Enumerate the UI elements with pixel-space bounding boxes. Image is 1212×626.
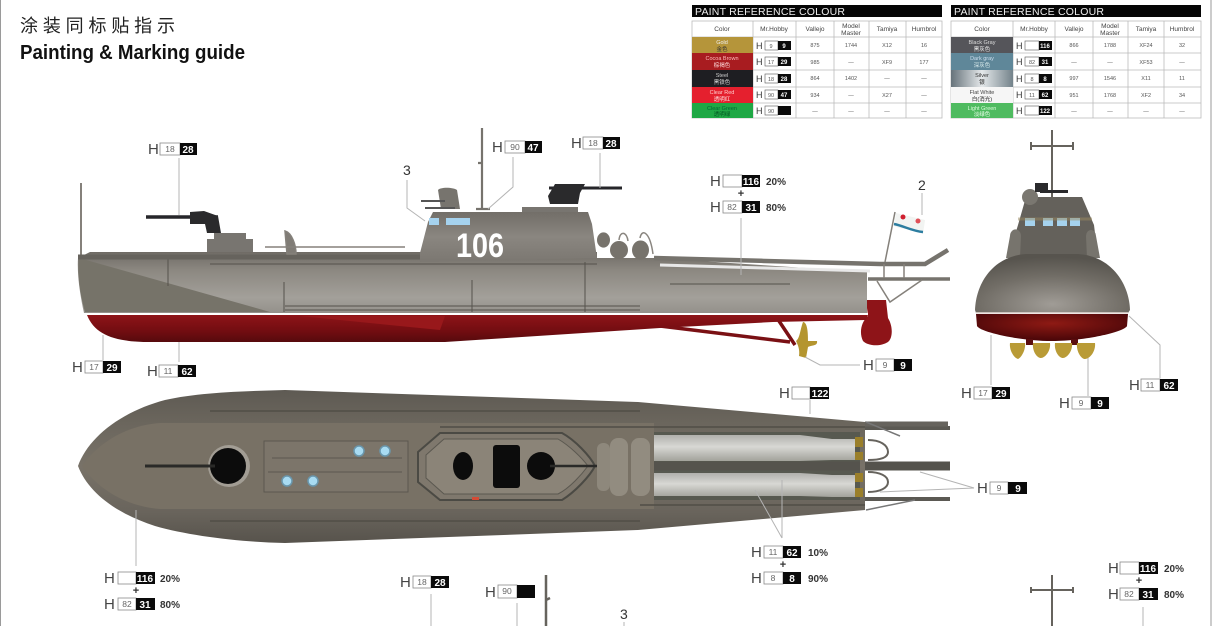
label mix H116 H82 right: + bbox=[1136, 575, 1142, 587]
red hull highlight bbox=[300, 316, 445, 330]
label H90 lower bbox=[485, 584, 535, 601]
label H17 29 front: H bbox=[961, 385, 972, 402]
paint table left: H bbox=[756, 90, 762, 100]
label mix H116 H82 top view: 82 bbox=[122, 599, 132, 609]
upper torpedo bbox=[654, 435, 855, 461]
propeller bbox=[796, 322, 817, 358]
paint table right: Black Gray bbox=[969, 40, 996, 46]
label H122 bbox=[779, 385, 829, 402]
paint table left: Clear Green bbox=[707, 106, 737, 112]
paint table right: Color bbox=[974, 26, 991, 33]
hull detail lines bbox=[168, 255, 790, 312]
paint table right: 34 bbox=[1179, 93, 1185, 99]
label H18 28 aft gun: H bbox=[571, 135, 582, 152]
label H9 9 front: 9 bbox=[1097, 399, 1103, 410]
paint table right: 122 bbox=[1040, 109, 1051, 115]
paint table left: 934 bbox=[810, 93, 820, 99]
red lower hull bbox=[87, 315, 868, 342]
label mix H11 H8 torpedoes: H bbox=[751, 570, 762, 587]
label H122: H bbox=[779, 385, 790, 402]
label mix H116 H82 right: H bbox=[1108, 560, 1119, 577]
paint table right: — bbox=[1179, 60, 1185, 66]
paint table left: Vallejo bbox=[805, 26, 825, 33]
label H18 28 lower: 18 bbox=[417, 577, 427, 587]
paint table left: Mr.Hobby bbox=[760, 26, 789, 33]
label H11 62 front: 11 bbox=[1146, 380, 1155, 390]
paint table left: — bbox=[848, 60, 854, 66]
label H11 62 front bbox=[1129, 377, 1178, 394]
label mix H116 H82 right: 20% bbox=[1164, 564, 1184, 575]
front view of boat bbox=[975, 130, 1130, 359]
paint table left: 18 bbox=[768, 77, 774, 83]
paint table left: Color bbox=[714, 26, 731, 33]
label mix H116 H82 top view: H bbox=[104, 570, 115, 587]
paint table right: 62 bbox=[1042, 93, 1049, 99]
four propellers bbox=[1010, 343, 1095, 359]
paint table left: — bbox=[921, 109, 927, 115]
paint table left: 9 bbox=[782, 44, 786, 50]
paint table left: 1744 bbox=[845, 43, 857, 49]
torpedo centre beam bbox=[654, 462, 860, 470]
label H18 28 lower: 28 bbox=[434, 578, 446, 589]
paint table right: 866 bbox=[1069, 43, 1079, 49]
paint table left: 1402 bbox=[845, 76, 857, 82]
paint table right: 32 bbox=[1179, 43, 1185, 49]
paint table left: 29 bbox=[781, 60, 788, 66]
paint table left: Master bbox=[841, 30, 862, 37]
paint table right: X11 bbox=[1141, 76, 1151, 82]
label H9 9 stern: H bbox=[977, 480, 988, 497]
label mix H11 H8 torpedoes: 8 bbox=[789, 574, 795, 585]
stern frames bbox=[868, 440, 888, 492]
top view of boat bbox=[78, 390, 950, 543]
paint table left: — bbox=[921, 76, 927, 82]
life raft cylinders bbox=[597, 443, 610, 491]
paint table left bbox=[692, 5, 942, 118]
paint table left: Steel bbox=[716, 73, 728, 79]
label H90 47: 47 bbox=[527, 143, 539, 154]
paint table right: 997 bbox=[1069, 76, 1079, 82]
paint table right: 淡绿色 bbox=[974, 110, 991, 118]
label H18 28 aft gun: 28 bbox=[605, 139, 617, 150]
paint table right: 1788 bbox=[1104, 43, 1116, 49]
paint table left: PAINT REFERENCE COLOUR bbox=[695, 6, 845, 18]
label mix H116 H82 side: + bbox=[738, 188, 744, 200]
propeller hubs bbox=[1026, 339, 1078, 345]
forward gun barrel bbox=[145, 464, 215, 468]
paint table right: H bbox=[1016, 106, 1022, 116]
grey hull bbox=[78, 252, 867, 313]
paint table left: X27 bbox=[882, 93, 892, 99]
label H18 28 lower bbox=[400, 574, 449, 591]
label H11 62 front: H bbox=[1129, 377, 1140, 394]
paint table right: XF2 bbox=[1141, 93, 1151, 99]
label mix H116 H82 top view: H bbox=[104, 596, 115, 613]
callout: number 3: 3 bbox=[403, 162, 411, 178]
paint table right: XF53 bbox=[1139, 60, 1153, 66]
title bbox=[20, 16, 245, 64]
label H9 9 propeller: H bbox=[863, 357, 874, 374]
paint table right: 白(消光) bbox=[972, 95, 992, 103]
paint table right: H bbox=[1016, 74, 1022, 84]
lower torpedo bbox=[654, 473, 855, 497]
label H90 lower: H bbox=[485, 584, 496, 601]
bridge windows bbox=[429, 218, 470, 225]
label H11 62 side: 11 bbox=[164, 366, 173, 376]
paint table right: XF24 bbox=[1139, 43, 1153, 49]
paint table right: — bbox=[1071, 60, 1077, 66]
label H18 28 bow gun: H bbox=[148, 141, 159, 158]
paint table left: Gold bbox=[716, 40, 728, 46]
paint table left: 28 bbox=[781, 77, 788, 83]
paint table right: H bbox=[1016, 90, 1022, 100]
paint table left: Cocoa Brown bbox=[705, 56, 739, 62]
deck outline bbox=[78, 390, 865, 543]
deck fittings bbox=[265, 231, 405, 254]
label mix H116 H82 right: 80% bbox=[1164, 590, 1184, 601]
paint table right: 82 bbox=[1029, 60, 1035, 66]
label H9 9 front: H bbox=[1059, 395, 1070, 412]
label H90 47: H bbox=[492, 139, 503, 156]
paint table left: 透明绿 bbox=[714, 110, 731, 118]
torpedo rails bbox=[654, 250, 948, 264]
label mix H116 H82 right: 82 bbox=[1124, 589, 1134, 599]
paint table left: X12 bbox=[882, 43, 892, 49]
paint table right: Model bbox=[1101, 23, 1119, 30]
paint table right: Flat White bbox=[970, 90, 994, 96]
paint table right: PAINT REFERENCE COLOUR bbox=[954, 6, 1104, 18]
paint table left: 864 bbox=[810, 76, 820, 82]
aft machine gun bbox=[549, 186, 622, 190]
label mix H116 H82 side: 80% bbox=[766, 203, 786, 214]
callout: number 3 lower: 3 bbox=[620, 606, 628, 622]
label H18 28 aft gun: 18 bbox=[588, 138, 598, 148]
bridge gunsight bbox=[438, 188, 460, 209]
paint table right: 深灰色 bbox=[974, 61, 991, 69]
deck centre band bbox=[82, 423, 654, 509]
paint table left: Humbrol bbox=[912, 26, 937, 33]
paint table left: — bbox=[812, 109, 818, 115]
label mix H116 H82 side: 116 bbox=[743, 177, 760, 188]
label H11 62 side: H bbox=[147, 363, 158, 380]
label mix H116 H82 right bbox=[1108, 560, 1184, 603]
paint table right: Mr.Hobby bbox=[1020, 26, 1049, 33]
label mix H11 H8 torpedoes: 10% bbox=[808, 548, 828, 559]
label H17 29 side: 17 bbox=[89, 362, 99, 372]
paint table right: 11 bbox=[1179, 76, 1185, 82]
paint table left: 棕褐色 bbox=[714, 61, 731, 69]
smoke flasks bbox=[597, 232, 649, 260]
lower front view mast bbox=[1031, 575, 1073, 626]
paint table right: 黑灰色 bbox=[974, 45, 991, 53]
label mix H116 H82 top view bbox=[104, 570, 180, 613]
side view of boat bbox=[78, 128, 950, 358]
paint table left: — bbox=[921, 93, 927, 99]
paint table right: — bbox=[1071, 109, 1077, 115]
paint table left: 透明红 bbox=[714, 95, 731, 103]
stern rudder bbox=[861, 300, 892, 345]
leader lines bbox=[103, 153, 1160, 626]
label mix H11 H8 torpedoes: 90% bbox=[808, 574, 828, 585]
paint table left: 9 bbox=[769, 44, 773, 50]
paint table left: H bbox=[756, 57, 762, 67]
label H9 9 propeller: 9 bbox=[900, 361, 906, 372]
paint table right: H bbox=[1016, 41, 1022, 51]
label mix H116 H82 side: H bbox=[710, 199, 721, 216]
paint table left: 17 bbox=[768, 60, 774, 66]
label mix H116 H82 side: H bbox=[710, 173, 721, 190]
mast and yard bbox=[1031, 130, 1073, 205]
label H9 9 propeller: 9 bbox=[883, 360, 888, 370]
label mix H11 H8 torpedoes: 62 bbox=[786, 548, 798, 559]
paint table left: 黑铁色 bbox=[714, 78, 731, 86]
torpedo well bbox=[654, 432, 860, 500]
forward gun pit bbox=[210, 448, 246, 484]
label H17 29 side bbox=[72, 359, 121, 376]
paint table right: Vallejo bbox=[1064, 26, 1084, 33]
side flasks bbox=[1006, 229, 1100, 258]
label mix H116 H82 top view: 20% bbox=[160, 574, 180, 585]
forward machine gun bbox=[146, 215, 218, 219]
paint table left: 金色 bbox=[716, 45, 728, 53]
front windows bbox=[1025, 218, 1080, 226]
label H17 29 side: 29 bbox=[106, 363, 118, 374]
deck panel bbox=[264, 441, 408, 492]
label mix H11 H8 torpedoes: 11 bbox=[769, 547, 778, 557]
forward gun ring bbox=[208, 445, 250, 487]
label mix H116 H82 top view: 80% bbox=[160, 600, 180, 611]
label H9 9 stern: 9 bbox=[997, 483, 1002, 493]
label H17 29 front: 17 bbox=[978, 388, 988, 398]
label H11 62 side bbox=[147, 363, 196, 380]
label mix H11 H8 torpedoes bbox=[751, 544, 828, 587]
front superstructure bbox=[1008, 197, 1098, 258]
label mix H116 H82 top view: + bbox=[133, 585, 139, 597]
label mix H116 H82 side: 20% bbox=[766, 177, 786, 188]
paint table right bbox=[951, 5, 1201, 118]
torpedo tube rails bbox=[860, 428, 950, 499]
paint table right: — bbox=[1143, 109, 1149, 115]
label H17 29 side: H bbox=[72, 359, 83, 376]
paint table left: Model bbox=[842, 23, 860, 30]
label mix H11 H8 torpedoes: + bbox=[780, 559, 786, 571]
label H90 47 bbox=[492, 139, 542, 156]
label mix H116 H82 side: 82 bbox=[727, 202, 737, 212]
label H18 28 aft gun bbox=[571, 135, 620, 152]
paint table left: — bbox=[848, 109, 854, 115]
cockpit bbox=[418, 433, 595, 500]
label mix H116 H82 right: H bbox=[1108, 586, 1119, 603]
cockpit inner band bbox=[426, 439, 588, 494]
blue deck lights bbox=[282, 446, 390, 486]
label mix H116 H82 right: 31 bbox=[1142, 590, 1154, 601]
callout: number 2: 2 bbox=[918, 177, 926, 193]
paint table right: Master bbox=[1100, 30, 1121, 37]
label mix H11 H8 torpedoes: 8 bbox=[771, 573, 776, 583]
paint table right: 1768 bbox=[1104, 93, 1116, 99]
front red hull bbox=[976, 314, 1128, 341]
paint table left: 47 bbox=[781, 93, 788, 99]
paint table right: 116 bbox=[1040, 44, 1050, 50]
paint table right: — bbox=[1107, 109, 1113, 115]
paint table left: 90 bbox=[768, 109, 774, 115]
label H17 29 front: 29 bbox=[995, 389, 1007, 400]
paint table left: H bbox=[756, 106, 762, 116]
paint table right: — bbox=[1179, 109, 1185, 115]
label mix H116 H82 right: 116 bbox=[1140, 564, 1157, 575]
label mix H116 H82 top view: 31 bbox=[139, 600, 151, 611]
paint table right: Humbrol bbox=[1170, 26, 1195, 33]
label H9 9 propeller bbox=[863, 357, 912, 374]
paint table left: 90 bbox=[768, 93, 774, 99]
label H18 28 bow gun bbox=[148, 141, 197, 158]
paint table left: H bbox=[756, 74, 762, 84]
superstructure bbox=[420, 212, 597, 262]
brass fittings bbox=[855, 437, 863, 497]
label H18 28 lower: H bbox=[400, 574, 411, 591]
label H9 9 stern bbox=[977, 480, 1027, 497]
paint table right: 银 bbox=[979, 78, 985, 86]
paint table right: 8 bbox=[1043, 77, 1047, 83]
label H90 lower: 90 bbox=[502, 586, 512, 596]
label H90 47: 90 bbox=[510, 142, 520, 152]
paint table right: 31 bbox=[1042, 60, 1049, 66]
mast bbox=[476, 128, 490, 209]
label mix H116 H82 side: 31 bbox=[745, 203, 757, 214]
title: Painting & Marking guide bbox=[20, 42, 245, 64]
label mix H116 H82 side bbox=[710, 173, 786, 216]
paint table left: — bbox=[884, 76, 890, 82]
lower side view mast bbox=[546, 575, 550, 626]
bow turret bbox=[207, 233, 253, 252]
front boot line bbox=[976, 312, 1128, 314]
bow staff bbox=[80, 183, 82, 256]
paint table right: Light Green bbox=[968, 106, 996, 112]
front hull dome bbox=[975, 254, 1130, 313]
hull number 106: 106 bbox=[456, 227, 504, 265]
paint table left: Clear Red bbox=[710, 90, 734, 96]
paint table left: 985 bbox=[810, 60, 820, 66]
paint table left: H bbox=[756, 41, 762, 51]
paint table right: Tamiya bbox=[1136, 26, 1157, 33]
deck rails bbox=[210, 411, 865, 521]
label H18 28 bow gun: 28 bbox=[182, 145, 194, 156]
label H122: 122 bbox=[812, 389, 829, 400]
paint table right: 8 bbox=[1030, 77, 1034, 83]
label H9 9 front: 9 bbox=[1079, 398, 1084, 408]
label H9 9 front bbox=[1059, 395, 1109, 412]
bow shade bbox=[78, 258, 270, 312]
label mix H116 H82 top view: 116 bbox=[137, 574, 154, 585]
paint table left: XF9 bbox=[882, 60, 892, 66]
hatches bbox=[453, 452, 473, 480]
label H18 28 bow gun: 18 bbox=[165, 144, 175, 154]
paint table right: 1546 bbox=[1104, 76, 1116, 82]
paint table right: — bbox=[1107, 60, 1113, 66]
paint table right: 11 bbox=[1029, 93, 1035, 99]
label mix H11 H8 torpedoes: H bbox=[751, 544, 762, 561]
title: 涂装同标贴指示 bbox=[20, 16, 175, 36]
ensign flag bbox=[885, 212, 925, 262]
paint table right: Dark gray bbox=[970, 56, 994, 62]
paint table left: — bbox=[884, 109, 890, 115]
label H11 62 side: 62 bbox=[181, 367, 193, 378]
paint table right: 951 bbox=[1069, 93, 1079, 99]
paint table left: Tamiya bbox=[877, 26, 898, 33]
propeller strut bbox=[660, 318, 795, 345]
label H11 62 front: 62 bbox=[1163, 381, 1175, 392]
paint table left: 875 bbox=[810, 43, 820, 49]
label H9 9 stern: 9 bbox=[1015, 484, 1021, 495]
paint table right: Silver bbox=[975, 73, 989, 79]
paint table left: 177 bbox=[919, 60, 929, 66]
label H17 29 front bbox=[961, 385, 1010, 402]
paint table left: — bbox=[848, 93, 854, 99]
paint table left: 16 bbox=[921, 43, 927, 49]
paint table right: H bbox=[1016, 57, 1022, 67]
white boot line bbox=[84, 313, 868, 315]
